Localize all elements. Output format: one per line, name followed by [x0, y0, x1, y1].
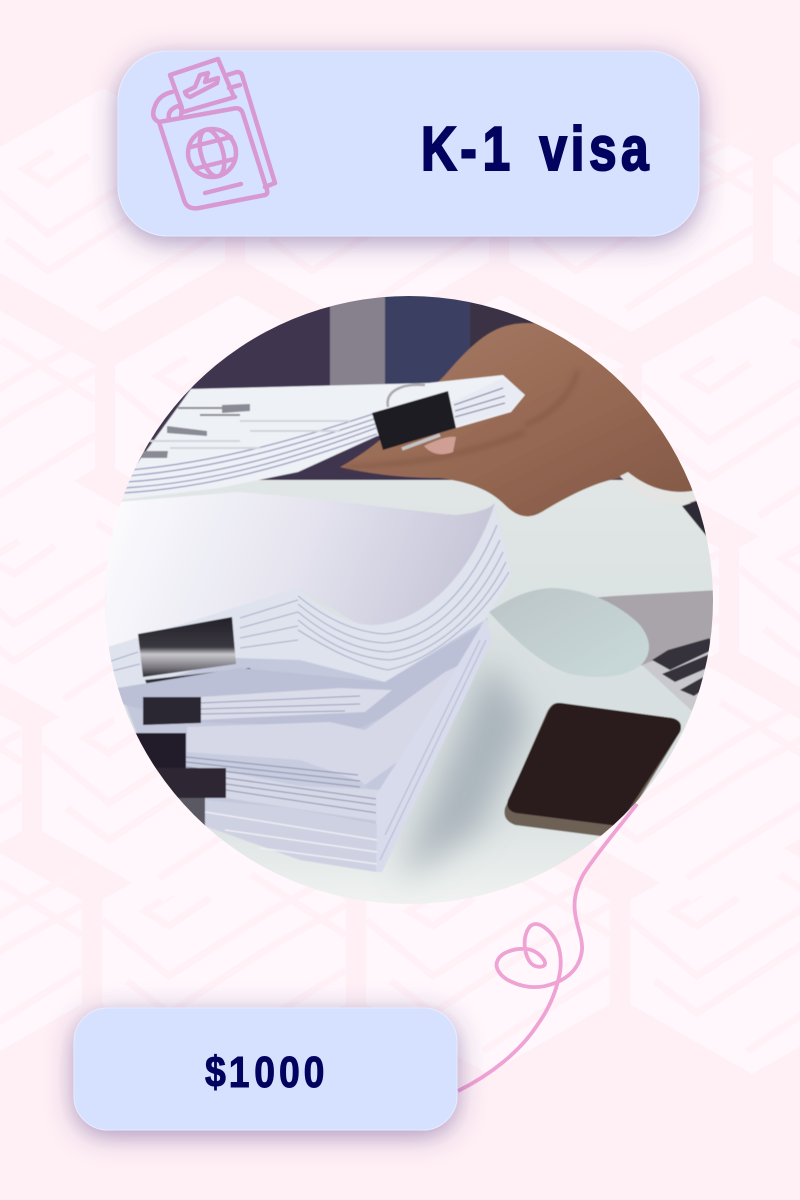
right wall of stacked paper: [376, 618, 492, 872]
smartphone: [504, 703, 681, 837]
mouse: [489, 588, 649, 677]
icon: passport with boarding ticket: [153, 59, 275, 208]
decorative looped connector line: [458, 804, 637, 1091]
panel: K-1 visa heading: [118, 51, 699, 236]
lower stack silhouette: [126, 618, 488, 824]
watch strap and sleeve: [620, 472, 698, 504]
main stack side pages: [105, 503, 512, 690]
panel: price: [74, 1008, 457, 1130]
middle paper layers: [118, 668, 258, 706]
photo backdrop: [136, 306, 624, 481]
circular photo: stacks of clipped documents on a desk: [100, 290, 720, 910]
price text: $1000: [205, 1047, 324, 1097]
top binder clip: [372, 391, 456, 450]
hand holding papers: [340, 323, 720, 516]
binder clip one: [138, 617, 236, 677]
main stack top sheet: [105, 492, 512, 648]
laptop: [598, 590, 713, 666]
lower binder clips: [143, 697, 201, 725]
desk surface: [100, 480, 720, 910]
heading text: K-1 visa: [421, 114, 649, 183]
bottom paper block: [205, 800, 377, 872]
top paper stack: [120, 375, 525, 500]
